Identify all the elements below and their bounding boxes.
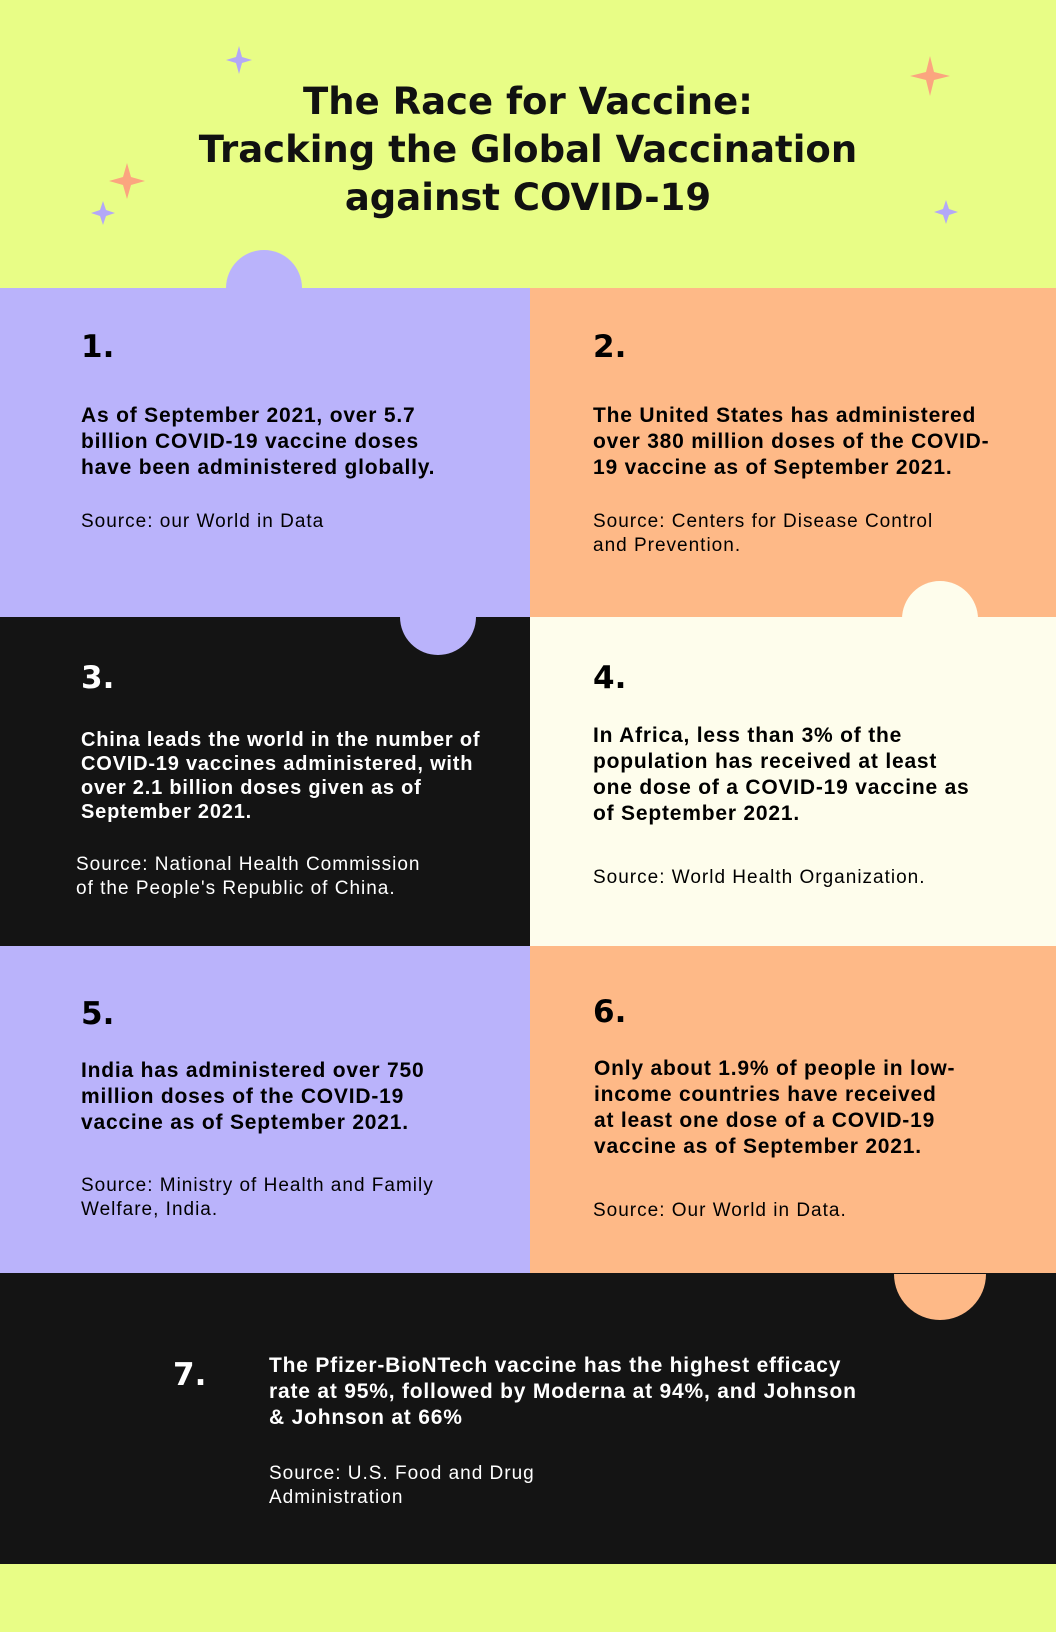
title: The Race for Vaccine:	[303, 80, 753, 123]
panel 3: Source: National Health Commission	[76, 854, 420, 875]
panel 7: Administration	[269, 1487, 403, 1508]
panel 7: 7.	[173, 1357, 206, 1393]
panel 4: population has received at least	[593, 750, 937, 773]
puzzle knob: lavender top	[226, 250, 302, 288]
panel 2: The United States has administered	[593, 404, 976, 427]
panel 7: rate at 95%, followed by Moderna at 94%, and Johnson	[269, 1380, 857, 1403]
title	[198, 80, 857, 219]
panel 6	[530, 946, 1056, 1273]
panel 1: As of September 2021, over 5.7	[81, 404, 415, 427]
panel 2: Source: Centers for Disease Control	[593, 511, 933, 532]
panel 2: and Prevention.	[593, 535, 741, 556]
panel 7: & Johnson at 66%	[269, 1406, 463, 1429]
panel 6: 6.	[593, 994, 626, 1030]
panel 1: 1.	[81, 329, 114, 365]
panel 6: income countries have received	[594, 1083, 937, 1106]
panel 6: vaccine as of September 2021.	[594, 1135, 922, 1158]
panel 1	[0, 288, 530, 617]
panel 4	[530, 617, 1056, 946]
panel 3: China leads the world in the number of	[81, 729, 480, 751]
panel 2: 19 vaccine as of September 2021.	[593, 456, 952, 479]
panel 3: over 2.1 billion doses given as of	[81, 777, 422, 799]
icon: sparkles	[91, 46, 958, 225]
panel 1: have been administered globally.	[81, 456, 435, 479]
panel 4: Source: World Health Organization.	[593, 867, 926, 888]
panel 2: 2.	[593, 329, 626, 365]
panel 3: of the People's Republic of China.	[76, 878, 396, 899]
panel 7: The Pfizer-BioNTech vaccine has the highest efficacy	[269, 1354, 841, 1377]
panel 4: one dose of a COVID-19 vaccine as	[593, 776, 970, 799]
panel 1: Source: our World in Data	[81, 511, 324, 532]
panel 5: million doses of the COVID-19	[81, 1085, 404, 1108]
panel 6: at least one dose of a COVID-19	[594, 1109, 935, 1132]
panel 5: Source: Ministry of Health and Family	[81, 1175, 434, 1196]
panel 5: India has administered over 750	[81, 1059, 424, 1082]
panel 1: billion COVID-19 vaccine doses	[81, 430, 419, 453]
panel 5	[0, 946, 530, 1273]
panel 7	[0, 1273, 1056, 1564]
panel 7: Source: U.S. Food and Drug	[269, 1463, 535, 1484]
title: Tracking the Global Vaccination	[199, 128, 857, 171]
panel 3: September 2021.	[81, 801, 252, 823]
panel 4: of September 2021.	[593, 802, 800, 825]
panel 6: Only about 1.9% of people in low-	[594, 1057, 955, 1080]
panel 2: over 380 million doses of the COVID-	[593, 430, 989, 453]
panel 2	[530, 288, 1056, 617]
puzzle knob: cream into peach	[902, 581, 978, 617]
panel 4: In Africa, less than 3% of the	[593, 724, 902, 747]
panel 3: 3.	[81, 660, 114, 696]
puzzle knob: peach into black	[894, 1274, 986, 1320]
panel 6: Source: Our World in Data.	[593, 1200, 847, 1221]
panel 3	[0, 617, 530, 946]
panel 5: vaccine as of September 2021.	[81, 1111, 409, 1134]
panel 4: 4.	[593, 660, 626, 696]
panel 5: Welfare, India.	[81, 1199, 218, 1220]
panel 3: COVID-19 vaccines administered, with	[81, 753, 473, 775]
panel 5: 5.	[81, 996, 114, 1032]
puzzle knob: lavender into black	[400, 617, 476, 655]
title: against COVID-19	[345, 176, 711, 219]
